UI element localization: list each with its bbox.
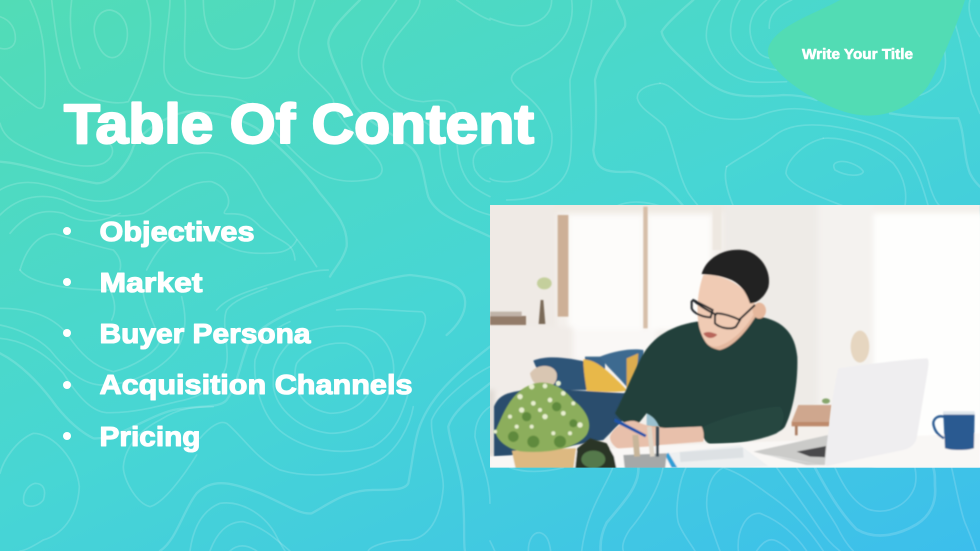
- pen cup: [623, 453, 667, 470]
- mug: [943, 412, 975, 450]
- glasses: [692, 300, 755, 328]
- hair: [702, 250, 769, 303]
- item: Pricing: [63, 421, 200, 452]
- hand and forearm: [609, 420, 705, 449]
- succulent: [575, 438, 617, 470]
- plant pot: [512, 448, 576, 470]
- shelf and vase: [490, 316, 526, 325]
- desk: [490, 358, 980, 470]
- decorative badge blob with title: [768, 0, 965, 116]
- title: Table Of Content: [64, 92, 534, 155]
- paper document: [670, 446, 766, 468]
- room backdrop: [490, 205, 980, 468]
- sofa: [585, 357, 605, 390]
- dried plant: [851, 331, 869, 363]
- neck and face: [703, 313, 757, 350]
- photo: man working at a desk with laptop: [483, 200, 980, 473]
- side table: [792, 405, 832, 422]
- item: Acquisition Channels: Acquisition Channels: [100, 369, 412, 400]
- badge blob: [768, 0, 965, 116]
- bulleted contents list: [63, 216, 412, 452]
- item: Buyer Persona: Buyer Persona: [100, 318, 311, 349]
- laptop: [753, 435, 828, 465]
- sweater torso and arm: [615, 316, 797, 444]
- man: [610, 250, 797, 457]
- item: Market: Market: [100, 267, 202, 298]
- flowering plant: [495, 383, 589, 452]
- curtain rods: [558, 215, 568, 317]
- item: Pricing: Pricing: [100, 421, 200, 452]
- badge text: Write Your Title: [802, 46, 913, 63]
- item: Objectives: Objectives: [100, 216, 255, 247]
- item: Market: [63, 267, 202, 298]
